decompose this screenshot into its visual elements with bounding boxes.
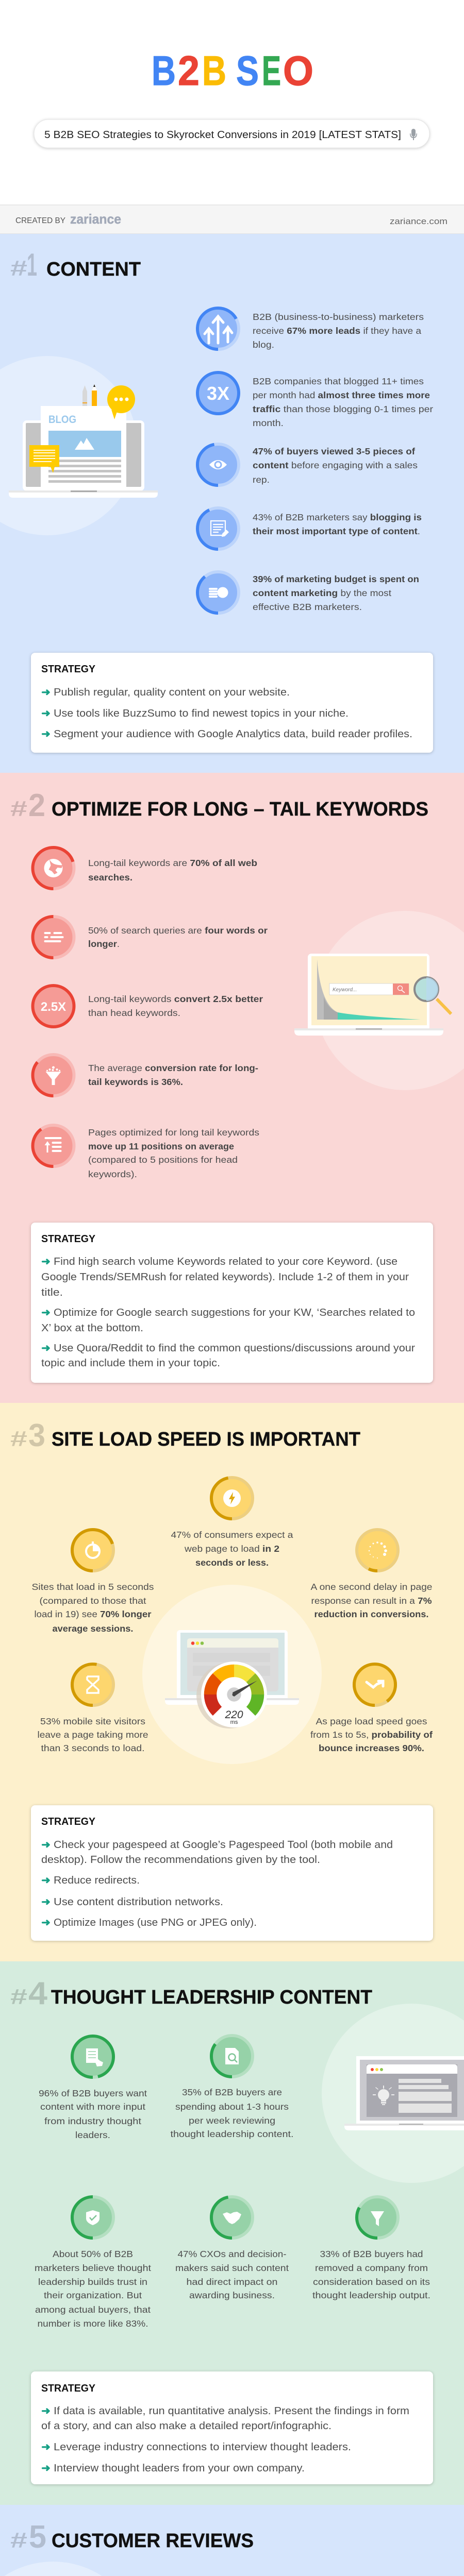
stat text	[253, 512, 422, 536]
icon: text lines	[33, 917, 74, 958]
stat text: their organization. But	[44, 2290, 142, 2300]
strategy box: ➜	[41, 728, 51, 740]
strategy box: ➜	[41, 1307, 51, 1318]
strategy box: Check your pagespeed at Google’s Pagespeed Tool (both mobile and	[54, 1839, 393, 1851]
stat text: reduction in conversions.	[314, 1609, 429, 1619]
stat: 70% of web searches	[33, 848, 257, 889]
stat text: response can result in a 7%	[311, 1596, 432, 1606]
stat text: from industry thought	[44, 2116, 141, 2126]
stat text: 47% of consumers expect a	[171, 1530, 293, 1540]
strategy box: Use content distribution networks.	[54, 1896, 223, 1908]
stat text: among actual buyers, that	[35, 2304, 151, 2315]
stat text: than 3 seconds to load.	[41, 1743, 144, 1753]
stat text: content marketing by the most	[253, 588, 391, 598]
strategy box: ➜	[41, 2442, 51, 2453]
strategy box: ➜	[41, 2463, 51, 2474]
strategy box: STRATEGY	[41, 2383, 96, 2394]
stat: convert 2.5x	[33, 986, 263, 1027]
title: B	[202, 48, 226, 94]
icon: loading dots	[357, 1530, 398, 1571]
stat: 47% of buyers	[197, 444, 418, 485]
strategy box: Publish regular, quality content on your website.	[54, 687, 290, 698]
stat: 67% more leads	[197, 308, 424, 350]
stat text: A one second delay in page	[310, 1582, 432, 1592]
stat text: thought leadership content.	[170, 2129, 294, 2139]
stat text: 35% of B2B buyers are	[182, 2087, 282, 2097]
stat text: consideration based on its	[313, 2277, 430, 2287]
strategy box: of a story, and can also make a detailed report/infographic.	[41, 2420, 332, 2432]
stat text	[253, 574, 419, 612]
stat text	[88, 1063, 258, 1087]
stat text: makers said such content	[175, 2263, 289, 2273]
strategy box: Interview thought leaders from your own company.	[54, 2463, 305, 2474]
stat: 39% of budget	[197, 572, 419, 613]
stat text	[253, 376, 433, 428]
illustration: speed gauge laptop: 220	[224, 1709, 243, 1721]
heading: #2: OPTIMIZE FOR LONG – TAIL KEYWORDS	[52, 799, 428, 820]
stat: 53% mobile visitors	[37, 1664, 148, 1753]
icon: 3X: 3X	[207, 383, 229, 404]
icon: document with pencil	[197, 508, 239, 549]
stat text: content with more input	[40, 2102, 145, 2112]
stat text: Long-tail keywords convert 2.5x better	[88, 994, 263, 1004]
stat text	[88, 1127, 259, 1179]
stat text	[253, 446, 418, 485]
created-by band	[0, 205, 464, 234]
panel: site load speed	[0, 1403, 464, 1961]
panel: customer reviews	[0, 2505, 464, 2576]
stat text	[171, 1530, 293, 1568]
stat text	[32, 1582, 154, 1634]
strategy box: ➜	[41, 1917, 51, 1928]
stat text	[39, 2088, 147, 2140]
title: B	[152, 48, 176, 94]
stat text: 53% mobile site visitors	[40, 1716, 145, 1726]
strategy box: If data is available, run quantitative analysis. Present the findings in form	[54, 2405, 409, 2417]
strategy box: Leverage industry connections to interview thought leaders.	[54, 2442, 351, 2453]
stat text: 39% of marketing budget is spent on	[253, 574, 419, 584]
stat text	[170, 2087, 294, 2139]
heading: #2	[10, 788, 428, 823]
stat text: marketers believe thought	[35, 2263, 151, 2273]
strategy box: ➜	[41, 708, 51, 719]
strategy box: Use tools like BuzzSumo to find newest topics in your niche.	[54, 708, 349, 719]
stat: 70% longer sessions	[32, 1530, 154, 1634]
strategy box: ➜	[41, 1839, 51, 1851]
stat text	[253, 312, 424, 350]
stat text: 50% of search queries are four words or	[88, 925, 268, 936]
heading: #4	[10, 1976, 372, 2011]
stat text: Sites that load in 5 seconds	[32, 1582, 154, 1592]
stat: 43% blogging	[197, 508, 422, 549]
icon: checklist	[72, 2036, 113, 2077]
stat: 36% conversion	[33, 1055, 258, 1096]
strategy box: STRATEGY	[41, 664, 96, 675]
heading: #1 content	[10, 247, 141, 283]
stat text	[312, 2249, 430, 2300]
icon: ranking up	[33, 1125, 74, 1166]
stat text: move up 11 positions on average	[88, 1141, 234, 1151]
strategy box: Optimize Images (use PNG or JPEG only).	[54, 1917, 257, 1928]
strategy box: Use Quora/Reddit to find the common questions/discussions around your	[54, 1343, 415, 1354]
stat: 50% trust	[35, 2197, 151, 2329]
strategy box: ➜	[41, 687, 51, 698]
stat: 47% expect 2 seconds	[171, 1478, 293, 1568]
stat text: awarding business.	[189, 2290, 275, 2300]
icon: funnel	[33, 1055, 74, 1096]
heading: #4: THOUGHT LEADERSHIP CONTENT	[51, 1987, 372, 2008]
strategy box: title.	[41, 1287, 63, 1298]
stat text: longer.	[88, 939, 120, 949]
icon: 2.5X: 2.5X	[41, 1000, 66, 1014]
stat: 35% reviewing	[170, 2036, 294, 2139]
strategy box	[31, 1223, 433, 1383]
stat text: month.	[253, 418, 284, 428]
title: E	[262, 48, 281, 94]
stat text	[35, 2249, 151, 2329]
stat text: bounce increases 90%.	[319, 1743, 424, 1753]
stat text: The average conversion rate for long-	[88, 1063, 258, 1073]
strategy box: ➜	[41, 2405, 51, 2417]
stat text: keywords).	[88, 1169, 137, 1179]
icon: coins	[197, 572, 239, 613]
strategy box: ➜	[41, 1875, 51, 1886]
stat: 33% removed	[312, 2197, 430, 2300]
strategy box: STRATEGY	[41, 1816, 96, 1827]
heading: #3: #	[10, 1427, 27, 1451]
stat text: from 1s to 5s, probability of	[310, 1730, 433, 1740]
stat text: leaders.	[75, 2130, 110, 2140]
illustration: star rating laptop	[0, 2562, 143, 2576]
stat text: (compared to 5 positions for head	[88, 1155, 238, 1165]
created-by band: zariance.com	[390, 216, 448, 226]
illustration: keyword laptop	[294, 911, 464, 1090]
strategy box: Optimize for Google search suggestions for your KW, ‘Searches related to	[54, 1307, 415, 1318]
stat text: Long-tail keywords are 70% of all web	[88, 858, 257, 868]
stat text: content before engaging with a sales	[253, 460, 418, 470]
stat text: As page load speed goes	[316, 1716, 427, 1726]
icon: stopwatch	[72, 1530, 113, 1571]
search bar subtitle	[34, 120, 429, 148]
heading: #3	[10, 1418, 360, 1453]
stat text: searches.	[88, 872, 132, 883]
stat text	[88, 925, 268, 949]
stat text: than head keywords.	[88, 1008, 180, 1018]
illustration: idea laptop	[322, 2004, 464, 2183]
strategy box: desktop). Follow the recommendations given by the tool.	[41, 1854, 320, 1866]
icon: eye	[197, 444, 239, 485]
stat text: number is more like 83%.	[37, 2318, 148, 2329]
strategy box: ➜	[41, 1256, 51, 1267]
icon: microphone	[410, 129, 417, 140]
stat: 96% of buyers	[39, 2036, 147, 2140]
strategy box: Segment your audience with Google Analytics data, build reader profiles.	[54, 728, 412, 740]
title: S	[236, 48, 259, 94]
stat text: load in 19) see 70% longer	[34, 1609, 152, 1619]
stat: three times more traffic	[197, 372, 433, 428]
strategy box	[31, 1805, 433, 1941]
heading: #1 content: CONTENT	[46, 259, 141, 280]
stat text: removed a company from	[315, 2263, 428, 2273]
strategy box: topic and include them in your topic.	[41, 1358, 220, 1369]
stat text	[88, 858, 257, 883]
heading: #4: 4	[28, 1976, 48, 2011]
icon: rising arrows	[197, 308, 239, 349]
strategy box: Reduce redirects.	[54, 1875, 140, 1886]
stat text: receive 67% more leads if they have a	[253, 326, 421, 336]
title	[152, 48, 313, 94]
stat text: thought leadership output.	[312, 2290, 430, 2300]
stat text: B2B (business-to-business) marketers	[253, 312, 424, 322]
heading: #5	[10, 2519, 254, 2555]
illustration: keyword laptop: Keyword...	[333, 987, 357, 993]
stat text: per month had almost three times more	[253, 390, 430, 400]
icon: lightning	[211, 1478, 253, 1519]
search bar subtitle: 5 B2B SEO Strategies to Skyrocket Conversions in 2019 [LATEST STATS]	[44, 129, 401, 141]
icon: bounce arrow	[354, 1664, 395, 1705]
stat text: had direct impact on	[187, 2277, 277, 2287]
heading: #5: CUSTOMER REVIEWS	[52, 2530, 254, 2552]
icon: handshake	[211, 2197, 253, 2238]
strategy box: Google Trends/SEMRush for related keywords). Include 1-2 of them in your	[41, 1272, 409, 1283]
stat: 47% CXOs	[175, 2197, 289, 2300]
strategy box: ➜	[41, 1896, 51, 1908]
illustration: speed gauge laptop: ms	[230, 1719, 238, 1725]
strategy box: STRATEGY	[41, 1233, 96, 1245]
stat text: leave a page taking more	[37, 1730, 148, 1740]
illustration: speed gauge laptop	[142, 1585, 322, 1764]
stat text: Pages optimized for long tail keywords	[88, 1127, 259, 1138]
stat text: (compared to those that	[39, 1596, 146, 1606]
stat text: rep.	[253, 474, 270, 485]
stat text: blog.	[253, 340, 274, 350]
icon: document search	[211, 2036, 253, 2077]
stat text	[310, 1716, 433, 1753]
heading: #5: 5	[29, 2519, 46, 2555]
heading: #1 content: 1	[27, 247, 37, 283]
heading: #2: #	[10, 796, 27, 821]
panel: content	[0, 234, 464, 773]
stat: 50% four words	[33, 917, 268, 958]
stat text: tail keywords is 36%.	[88, 1077, 183, 1087]
strategy box: X’ box at the bottom.	[41, 1323, 143, 1334]
stat text: 47% of buyers viewed 3-5 pieces of	[253, 446, 415, 456]
icon: hourglass	[72, 1664, 113, 1705]
panel: long-tail keywords	[0, 773, 464, 1403]
heading: #3: 3	[28, 1418, 45, 1453]
stat text: web page to load in 2	[184, 1544, 279, 1554]
stat text: spending about 1-3 hours	[175, 2102, 289, 2112]
strategy box	[31, 653, 433, 753]
stat text: traffic than those blogging 0-1 times per	[253, 404, 433, 414]
stat text: seconds or less.	[195, 1557, 269, 1568]
illustration: blog laptop	[0, 356, 158, 535]
stat text	[310, 1582, 432, 1619]
stat text: 47% CXOs and decision-	[177, 2249, 287, 2259]
stat text: 33% of B2B buyers had	[320, 2249, 423, 2259]
created-by band: CREATED BY	[15, 216, 65, 225]
icon: shield	[72, 2197, 113, 2238]
stat text	[37, 1716, 148, 1753]
stat: 7% reduction	[310, 1530, 432, 1619]
icon: 3X	[197, 372, 239, 414]
icon: globe	[33, 848, 74, 889]
stat text: leadership builds trust in	[38, 2277, 147, 2287]
title: O	[283, 48, 313, 94]
stat: move up 11 positions	[33, 1125, 259, 1179]
heading: #4: #	[10, 1985, 27, 2009]
stat text: effective B2B marketers.	[253, 602, 362, 612]
icon: 2.5X	[33, 986, 74, 1027]
created-by band: zariance	[70, 211, 121, 227]
stat text: B2B companies that blogged 11+ times	[253, 376, 424, 386]
stat text: their most important type of content .	[253, 526, 420, 536]
panel: thought leadership	[0, 1961, 464, 2505]
heading: #1 content: #	[10, 256, 27, 280]
stat text: About 50% of B2B	[53, 2249, 133, 2259]
strategy box	[31, 2371, 433, 2484]
title: 2	[178, 48, 200, 94]
icon: filter	[357, 2197, 398, 2238]
stat text	[175, 2249, 289, 2300]
illustration: blog laptop: BLOG	[48, 414, 76, 426]
heading: #3: SITE LOAD SPEED IS IMPORTANT	[52, 1429, 360, 1450]
stat text: 43% of B2B marketers say blogging is	[253, 512, 422, 522]
stat text: average sessions.	[53, 1623, 133, 1634]
heading: #2: 2	[28, 788, 45, 823]
stat text: per week reviewing	[189, 2115, 275, 2126]
strategy box: Find high search volume Keywords related to your core Keyword. (use	[54, 1256, 397, 1267]
stat text	[88, 994, 263, 1018]
stat: bounce 90%	[310, 1664, 433, 1753]
stat text: 96% of B2B buyers want	[39, 2088, 147, 2098]
heading: #5: #	[10, 2528, 27, 2552]
strategy box: ➜	[41, 1343, 51, 1354]
